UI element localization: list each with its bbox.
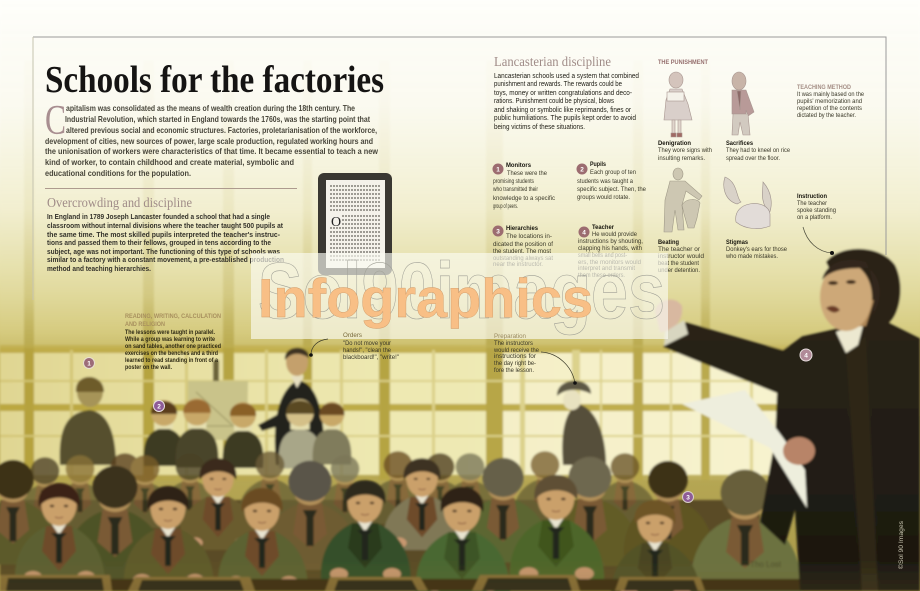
- intro lines: [45, 104, 379, 178]
- heading: Lancasterian discipline: [494, 55, 611, 70]
- intro lines: apitalism was consolidated as the means of wealth creation during the 18th century. The: [66, 104, 355, 113]
- text: orders: blackboard!", "write!": [343, 354, 400, 361]
- text: reading, writing, calculation and religion: The lessons were taught in parallel.: [125, 329, 215, 336]
- text: preparation: [493, 333, 539, 374]
- text: beating: instructor would: [658, 253, 704, 260]
- text: reading, writing, calculation and religion: [125, 314, 221, 371]
- item: monitors: promising students: [493, 178, 535, 185]
- poster on easel: [188, 360, 248, 440]
- text: orders: [343, 332, 400, 361]
- text: instruction: on a platform.: [797, 214, 832, 221]
- paragraph: subject, age was not important. The functioning of this type of schools was: [47, 247, 280, 256]
- item: hierarchies: dicated the position of: [493, 241, 553, 248]
- text: orders: hands!", "clean the: [343, 347, 391, 354]
- paragraph: method and teaching hierarchies.: [47, 264, 151, 273]
- badge 2: 2: [157, 404, 161, 410]
- item: teacher: 4: [582, 230, 586, 236]
- text: denigration: Denigration: [658, 140, 691, 147]
- paragraph: [494, 71, 639, 131]
- standing student, right: [557, 381, 606, 465]
- badge 3: [682, 492, 694, 502]
- drop cap: C: [45, 98, 66, 144]
- text: sacrifices: spread over the floor.: [726, 155, 780, 162]
- watermark panel: [251, 253, 668, 339]
- text: denigration: insulting remarks.: [658, 155, 705, 162]
- icon: donkey ears hat: [724, 177, 771, 229]
- text: reading, writing, calculation and religion: AND RELIGION: [125, 322, 165, 328]
- text: teaching method: repetition of the contents: [797, 105, 863, 112]
- watermark: outlined brand: Sol90images: [258, 246, 665, 335]
- item: hierarchies: near the instructor.: [493, 261, 543, 268]
- badge 1: [84, 358, 94, 368]
- intro lines: development of cities, new sources of power, large scale production, regulated working hours and: [45, 137, 373, 146]
- item: pupils: 2: [580, 166, 584, 174]
- paragraph: classroom without internal divisions where the teacher taught 500 pupils at: [47, 221, 283, 230]
- item: hierarchies: 3: [496, 228, 500, 236]
- front row of students: [15, 475, 701, 591]
- fade to paper at the top: [0, 0, 920, 348]
- item: teacher: them these orders.: [578, 272, 625, 279]
- text: instruction: Instruction: [797, 193, 827, 200]
- item: teacher: [578, 224, 643, 279]
- paper held by teacher: [682, 390, 815, 508]
- text: stigmas: Stigmas: [726, 239, 748, 246]
- frame lines: [33, 37, 886, 300]
- paragraph: rations. Punishment could be physical, blows: [494, 96, 614, 105]
- paragraph: tions and passed them to their fellows, grouped in tens according to the: [47, 238, 271, 247]
- teacher at the back: [258, 348, 324, 465]
- text: instruction: The teacher: [797, 200, 828, 207]
- item: monitors: 1: [496, 166, 500, 174]
- text: instruction: [797, 193, 836, 221]
- bench backdrop: [0, 500, 760, 585]
- section: lancasterian discipline: [494, 55, 639, 131]
- teacher with raised arm: [655, 249, 920, 591]
- text: beating: beat the student: [658, 260, 699, 267]
- text: sacrifices: They had to kneel on rice: [726, 147, 790, 154]
- paragraph: similar to a factory with a constant movement, a pre-established production: [47, 255, 284, 264]
- item: hierarchies: the student. The most: [493, 248, 551, 255]
- signature: Tho Lost: [750, 560, 782, 569]
- text: denigration: [658, 140, 712, 162]
- back rows of students: [13, 451, 659, 530]
- badge 4: [800, 349, 812, 361]
- badge 2: [154, 400, 164, 412]
- text: reading, writing, calculation and religion: exercises on the benches and a third: [125, 350, 218, 357]
- intro lines: Industrial Revolution, which started in England towards the 1760s, was the starting point that: [65, 115, 370, 124]
- icon: girl with sign: [664, 72, 692, 137]
- text: beating: The teacher or: [658, 246, 701, 253]
- item: monitors: group of peers.: [493, 203, 518, 210]
- text: preparation: The instructors: [494, 340, 534, 347]
- text: stigmas: [725, 239, 787, 260]
- text: teaching method: dictated by the teacher.: [797, 112, 856, 119]
- item: pupils: groups would rotate.: [577, 194, 630, 201]
- paragraph: public humiliations. The pupils kept order to avoid: [494, 113, 636, 122]
- item: teacher: He would provide: [592, 231, 637, 238]
- classroom windows: [0, 60, 920, 480]
- item: hierarchies: The locations in-: [506, 233, 552, 240]
- text: reading, writing, calculation and religion: READING, WRITING, CALCULATION: [125, 314, 221, 320]
- intro text with drop cap: [45, 98, 379, 178]
- text: preparation: the day right be-: [494, 360, 536, 367]
- badge 4: 4: [804, 352, 808, 360]
- text: preparation: would receive the: [493, 347, 539, 354]
- heading: the punishment: THE PUNISHMENT: [658, 60, 708, 66]
- tablet image: O: [331, 215, 341, 230]
- paragraph: toys, money or written congratulations and deco-: [494, 88, 632, 97]
- text: instruction: spoke standing: [797, 207, 836, 214]
- item: hierarchies: Hierarchies: [506, 225, 538, 232]
- desks and slates: [0, 575, 920, 591]
- text: beating: [658, 239, 704, 274]
- item: teacher: instructions by shouting,: [578, 238, 643, 245]
- item: pupils: Each group of ten: [590, 169, 636, 176]
- text: sacrifices: Sacrifices: [726, 140, 753, 147]
- paragraph: the same time. The most skilled pupils interpreted the teacher's instruc-: [47, 230, 280, 239]
- standing monitor, left: [60, 377, 116, 465]
- item: teacher: interpret and transmit: [578, 265, 635, 272]
- text: teaching method: pupils' memorization and: [797, 98, 862, 105]
- paragraph: and shaking or symbolic like reprimands, fines or: [494, 105, 631, 114]
- item: pupils: specific subject. Then, the: [577, 186, 646, 193]
- text: denigration: They wore signs with: [658, 147, 712, 154]
- leader line: orders: [309, 339, 328, 357]
- middle row of students: [0, 457, 802, 591]
- intro lines: the unionisation of workers were characteristics of that time. It became essential to teach a new: [45, 147, 379, 156]
- text: orders: "Do not move your: [343, 340, 392, 347]
- title: Schools for the factories: [45, 59, 384, 101]
- leader line: preparation: [541, 352, 577, 385]
- text: reading, writing, calculation and religion: learned to read standing in front of a: [125, 357, 218, 364]
- section: overcrowding and discipline: [47, 196, 284, 273]
- text: stigmas: Donkey's ears for those: [726, 246, 787, 253]
- paragraph: [47, 212, 284, 273]
- item: teacher: small bells and post-: [578, 252, 627, 259]
- text: beating: Beating: [658, 239, 679, 246]
- tablet image: [318, 173, 392, 275]
- text: reading, writing, calculation and religion: poster on the wall.: [125, 364, 172, 371]
- item: teacher: clapping his hands, with: [578, 245, 642, 252]
- text: teaching method: [797, 85, 864, 119]
- text: preparation: instructions for: [494, 353, 537, 360]
- intro lines: kind of worker, to contain childhood and create material, symbolic and: [45, 158, 294, 167]
- item: teacher: ers, the monitors would: [578, 259, 641, 266]
- item: hierarchies: [492, 225, 553, 268]
- item: monitors: who transmitted their: [492, 186, 539, 193]
- text: sacrifices: [726, 140, 790, 162]
- icon: beating: [664, 168, 702, 232]
- text: orders: Orders: [343, 332, 363, 339]
- item: monitors: Monitors: [506, 162, 531, 169]
- leader line: instruction: [803, 227, 834, 255]
- text: preparation: fore the lesson.: [494, 367, 534, 374]
- paragraph: punishment and rewards. The rewards could be: [494, 79, 622, 88]
- seated row facing poster: [144, 398, 351, 468]
- paragraph: Lancasterian schools used a system that combined: [494, 71, 639, 80]
- item: teacher: Teacher: [592, 224, 614, 231]
- icon: kneeling boy: [732, 72, 754, 135]
- paragraph: being victims of these situations.: [494, 122, 585, 131]
- item: hierarchies: outstanding always sat: [493, 255, 553, 262]
- item: pupils: students was taught a: [577, 178, 633, 185]
- text: teaching method: It was mainly based on the: [797, 91, 864, 98]
- item: pupils: Pupils: [590, 161, 606, 168]
- item: pupils: [576, 161, 646, 201]
- text: reading, writing, calculation and religion: While a group was learning to write: [125, 336, 215, 343]
- item: monitors: knowledge to a specific: [493, 195, 556, 202]
- text: teaching method: TEACHING METHOD: [797, 85, 852, 91]
- credit: ©Sol 90 Images: [897, 520, 905, 569]
- text: reading, writing, calculation and religion: on sand tables, another one practiced: [125, 343, 221, 350]
- text: stigmas: who made mistakes.: [725, 253, 778, 260]
- paragraph: In England in 1789 Joseph Lancaster founded a school that had a single: [47, 212, 270, 221]
- badge 1: 1: [87, 360, 91, 368]
- heading: Overcrowding and discipline: [47, 196, 192, 211]
- text: preparation: Preparation: [494, 333, 526, 340]
- watermark: orange brand: Infographics: [258, 267, 593, 329]
- badge 3: 3: [686, 494, 690, 502]
- intro lines: educational conditions for the population.: [45, 169, 191, 178]
- item: monitors: [492, 162, 556, 210]
- text: beating: under detention.: [658, 267, 700, 274]
- intro lines: altered previous social and economic structures. Factories, proletarianisation of the workforce,: [66, 126, 377, 135]
- item: monitors: These were the: [507, 170, 547, 177]
